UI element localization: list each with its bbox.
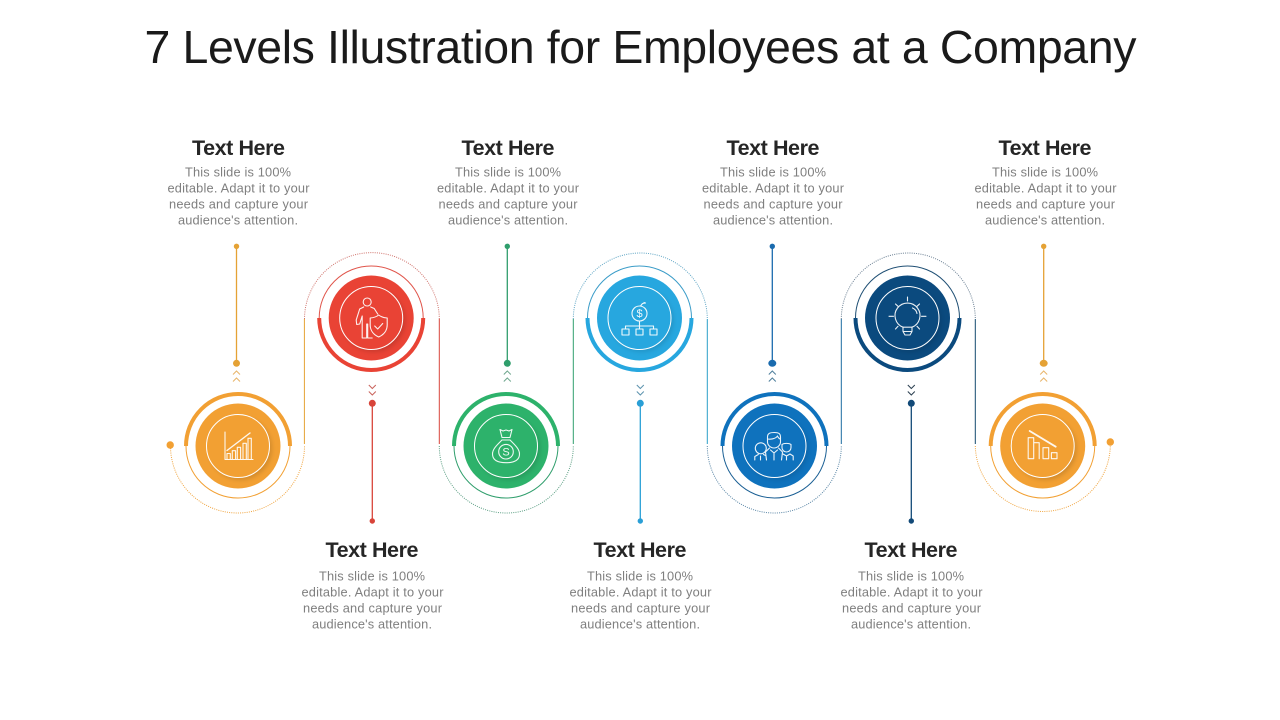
text block 6 (840, 538, 983, 632)
text block 1: Text Here (192, 136, 285, 160)
text block 7: needs and capture your (976, 196, 1116, 212)
dotted arc 3 (439, 446, 573, 513)
dotted arc 6 (841, 253, 975, 319)
text block 5: This slide is 100% (720, 164, 826, 180)
leader line 2 (369, 385, 376, 524)
connector 1 (303, 319, 305, 444)
circle 2 (319, 266, 423, 370)
text block 6: editable. Adapt it to your (840, 584, 983, 600)
text block 1: audience's attention. (178, 212, 298, 228)
leader line 6 (908, 385, 915, 524)
text block 2: needs and capture your (303, 600, 443, 616)
text block 6: needs and capture your (842, 600, 982, 616)
text block 2: This slide is 100% (319, 568, 425, 584)
leader line 7 (1040, 244, 1048, 382)
title: 7 Levels Illustration for Employees at a Company (144, 21, 1137, 73)
text block 6: audience's attention. (851, 616, 971, 632)
text block 2: audience's attention. (312, 616, 432, 632)
text block 2: Text Here (326, 538, 419, 562)
text block 1: editable. Adapt it to your (168, 180, 310, 196)
icon: team of people (755, 432, 793, 460)
leader line 4 (637, 385, 644, 524)
text block 3 (437, 136, 580, 228)
circle 6 (856, 266, 960, 370)
level 6: navy, light bulb (840, 253, 983, 632)
level 3: green, money bag (437, 136, 580, 513)
dotted arc 5 (707, 446, 841, 513)
circle 5 (722, 394, 826, 498)
text block 7: editable. Adapt it to your (974, 180, 1117, 196)
leader line 1 (233, 244, 240, 382)
text block 3: Text Here (462, 136, 555, 160)
text block 3: editable. Adapt it to your (437, 180, 580, 196)
text block 2 (302, 538, 444, 632)
text block 4: This slide is 100% (587, 568, 693, 584)
text block 3: This slide is 100% (455, 164, 561, 180)
text block 5: audience's attention. (713, 212, 833, 228)
leader line 3 (504, 244, 511, 382)
text block 7 (974, 136, 1117, 228)
text block 7: This slide is 100% (992, 164, 1098, 180)
text block 4: Text Here (594, 538, 687, 562)
level 1: orange, growth chart (166, 136, 310, 513)
text block 5: needs and capture your (704, 196, 843, 212)
connector 3 (572, 319, 574, 444)
text block 5 (702, 136, 845, 228)
icon: growth chart (225, 432, 253, 460)
leader line 5 (768, 244, 776, 382)
text block 4: needs and capture your (571, 600, 711, 616)
text block 6: This slide is 100% (858, 568, 964, 584)
icon: light bulb (889, 297, 926, 335)
text block 6: Text Here (864, 538, 958, 562)
circle 7 (991, 394, 1095, 498)
text block 4 (570, 538, 712, 632)
text block 3: needs and capture your (438, 196, 578, 212)
circle 4 (588, 266, 692, 370)
text block 7: Text Here (998, 136, 1092, 160)
circle 3 (454, 394, 558, 498)
dotted arc and end dot 7 (975, 438, 1114, 511)
connector 6 (974, 319, 976, 444)
text block 2: editable. Adapt it to your (302, 584, 444, 600)
text block 4: editable. Adapt it to your (570, 584, 712, 600)
level 4: light blue, money hierarchy (570, 253, 712, 632)
text block 1: This slide is 100% (185, 164, 291, 180)
level 5: mid blue, team (702, 136, 845, 513)
level 2: red, person with shield (302, 253, 444, 632)
text block 5: Text Here (726, 136, 820, 160)
dotted arc 2 (304, 253, 439, 319)
connector 4 (706, 319, 708, 444)
connector 5 (840, 319, 842, 444)
connector 2 (438, 319, 440, 444)
dotted arc and start dot 1 (166, 441, 304, 513)
text block 4: audience's attention. (580, 616, 700, 632)
icon: declining chart (1028, 431, 1057, 459)
dotted arc 4 (573, 253, 707, 319)
text block 1 (168, 136, 310, 228)
level 7: orange, declining chart (974, 136, 1117, 511)
circle 1 (186, 394, 290, 498)
icon: money hierarchy: $ (636, 308, 643, 320)
icon: person with shield (356, 298, 387, 338)
text block 5: editable. Adapt it to your (702, 180, 845, 196)
text block 1: needs and capture your (169, 196, 309, 212)
text block 7: audience's attention. (985, 212, 1105, 228)
icon: money bag: S (502, 446, 510, 458)
text block 3: audience's attention. (448, 212, 568, 228)
